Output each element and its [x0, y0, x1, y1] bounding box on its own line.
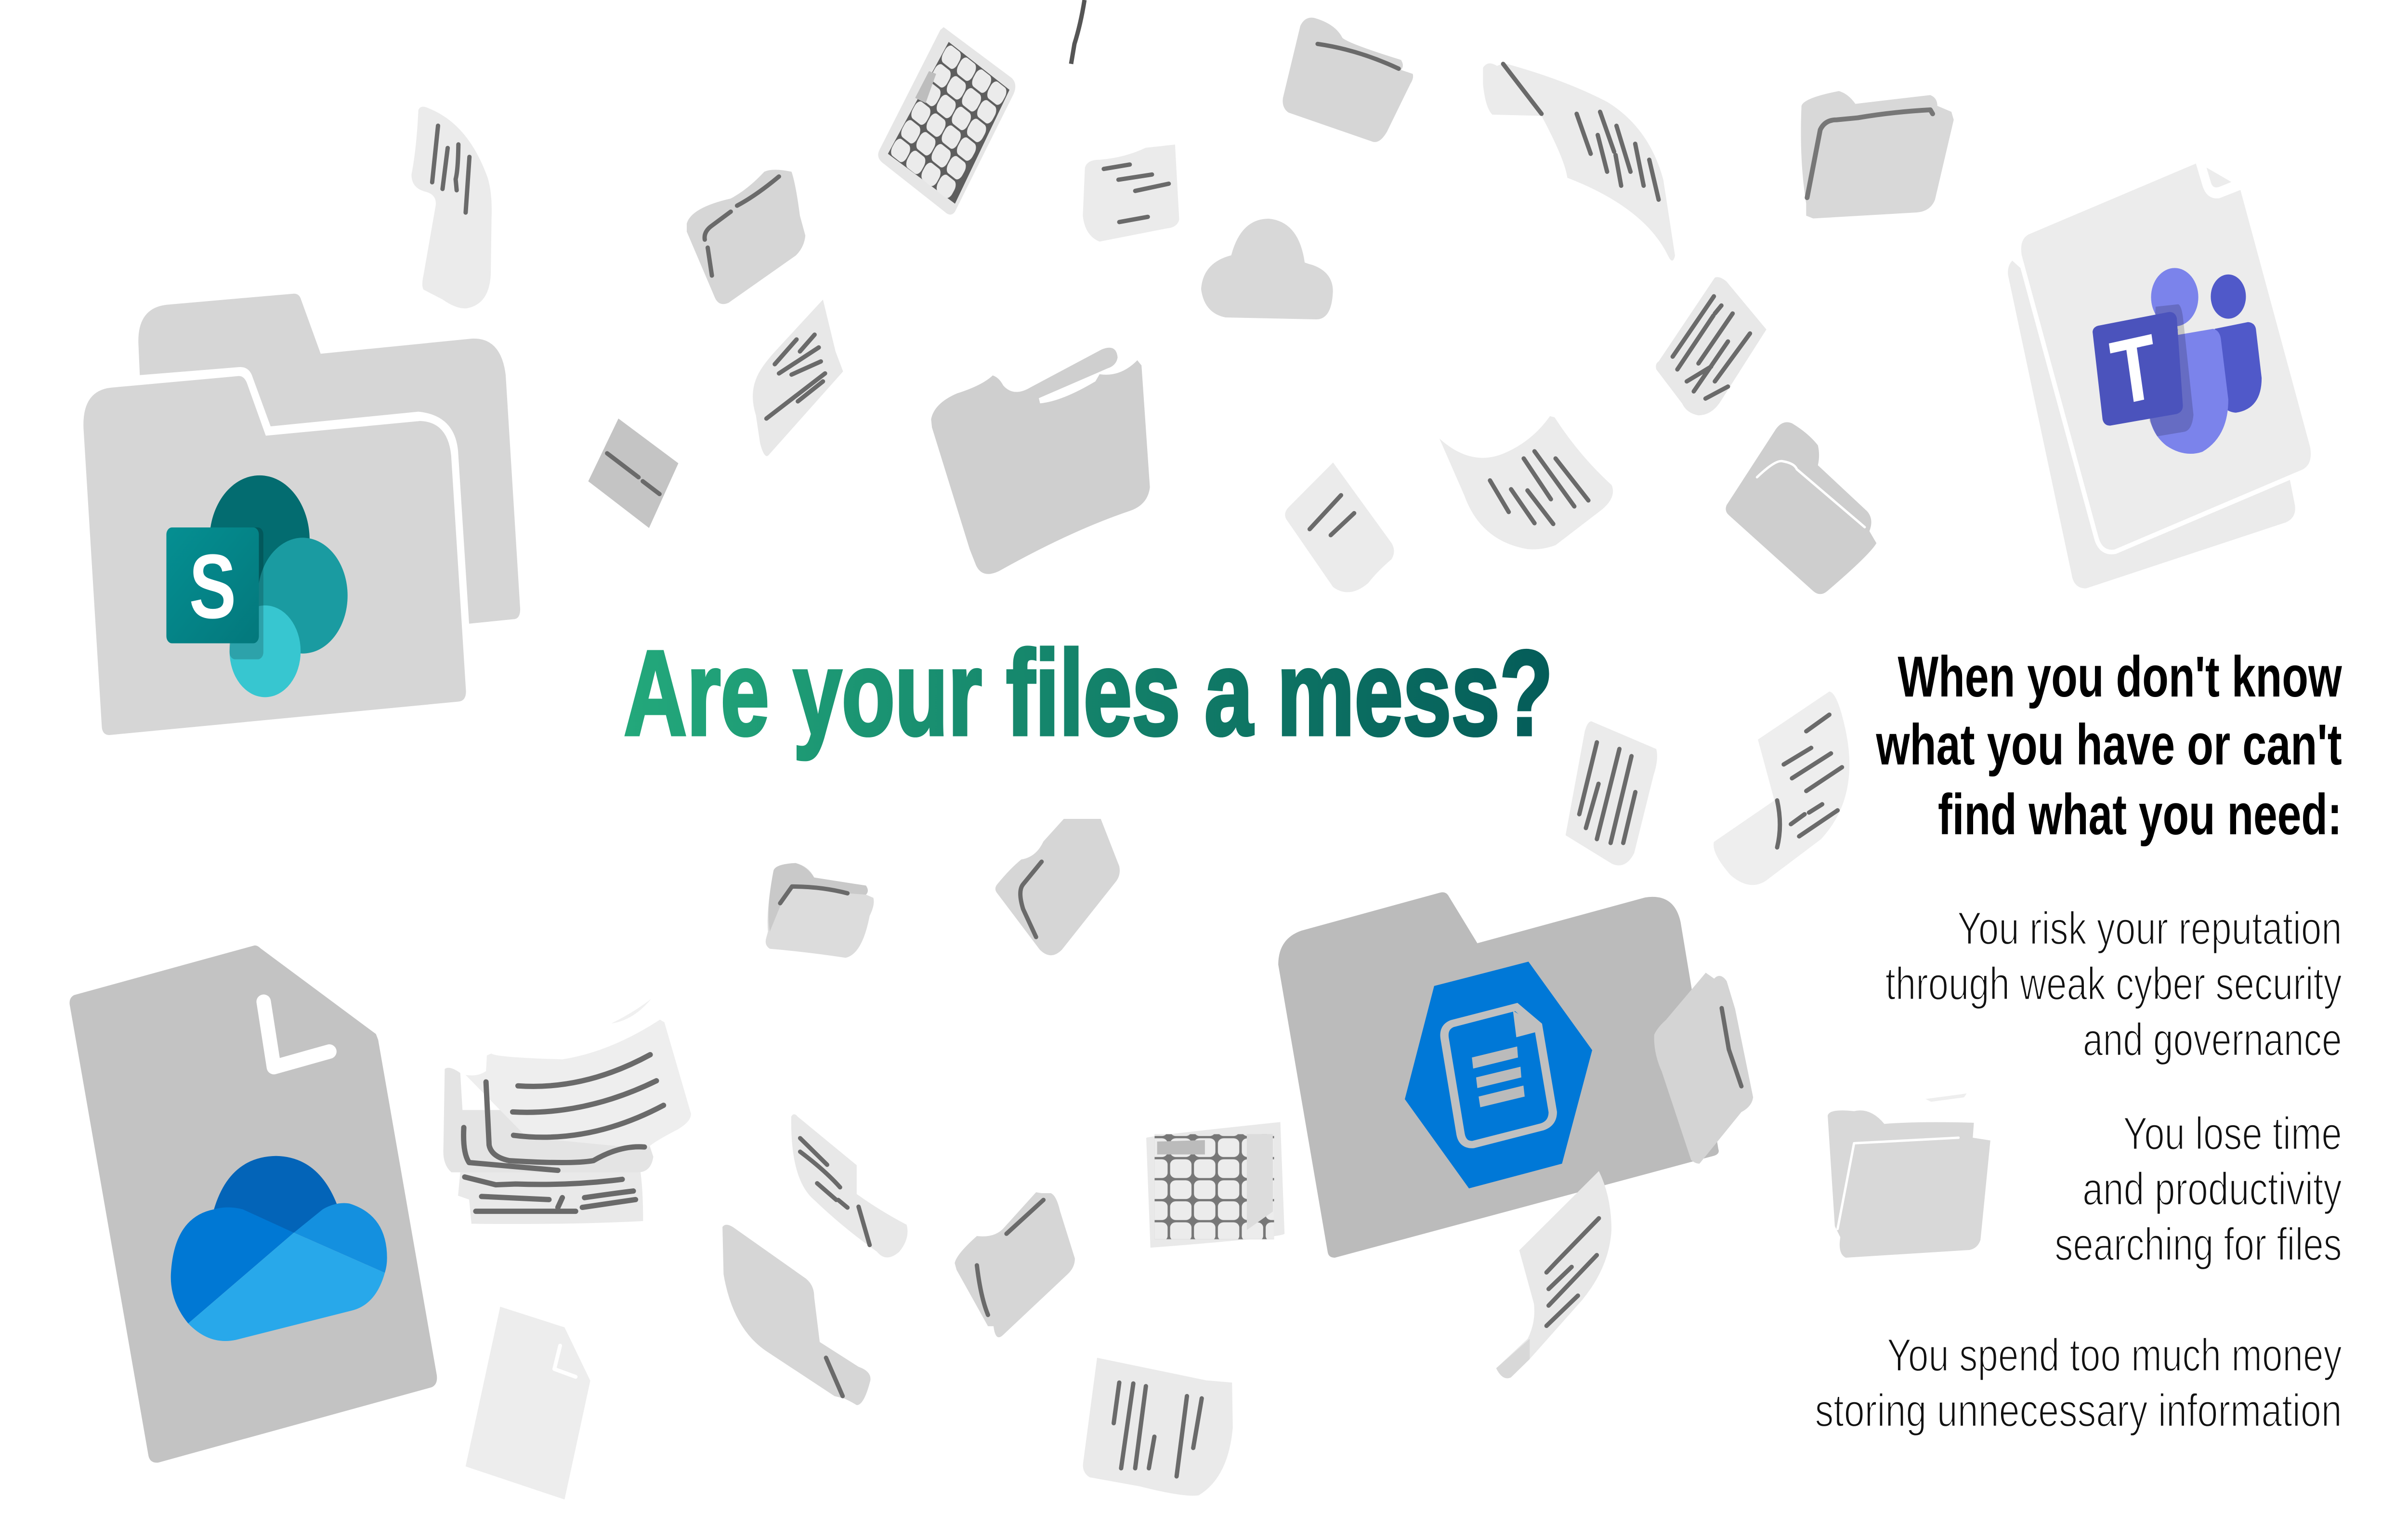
text block: time: You lose time: [2123, 1108, 2342, 1159]
teams back page: [2008, 261, 2295, 589]
heading: right column: find what you need:: [1938, 783, 2342, 847]
text block: reputation: [1885, 903, 2342, 1066]
icon: document in hexagon: [1444, 1007, 1553, 1144]
folder lower centre: [955, 1192, 1075, 1337]
central folder: [1278, 892, 1719, 1258]
document with lines: [1656, 277, 1767, 415]
large open folder: [931, 348, 1150, 574]
folder top right: [1801, 91, 1954, 219]
icon: blue hexagon: [1405, 961, 1592, 1188]
paper top centre: [1083, 145, 1179, 242]
heading: right column: [1876, 645, 2342, 847]
title: Are your files a mess?: [624, 626, 1553, 761]
icon: OneDrive cloud: [171, 1156, 387, 1341]
icon: SharePoint logo: [166, 475, 348, 697]
heading: right column: what you have or can't: [1876, 713, 2342, 777]
teams front page: [2021, 164, 2311, 550]
text block: time: [2055, 1108, 2342, 1270]
sharepoint back folder: [138, 294, 520, 624]
text block: time: searching for files: [2055, 1219, 2342, 1270]
grid document lower: [1146, 1122, 1284, 1248]
paper: top left: [411, 106, 492, 308]
text block: reputation: You risk your reputation: [1957, 903, 2342, 954]
text block: reputation: and governance: [2083, 1014, 2342, 1066]
stray line at top: [1071, 0, 1085, 64]
heading: right column: When you don't know: [1898, 645, 2342, 709]
document right: [1566, 721, 1657, 866]
text block: money: You spend too much money: [1887, 1329, 2342, 1381]
paper stack: [444, 999, 691, 1224]
text block: reputation: through weak cyber security: [1885, 958, 2342, 1010]
small folder: [687, 170, 805, 304]
folder top: [1283, 18, 1413, 142]
OneDrive file tile: [70, 946, 437, 1463]
folder centre: [995, 819, 1120, 955]
paper overlapping folder: [1496, 1171, 1611, 1378]
sharepoint front folder: [83, 376, 466, 735]
small paper: [1285, 462, 1394, 592]
curved paper: [1440, 416, 1613, 549]
text block: time: and productivity: [2082, 1163, 2342, 1215]
icon: Teams T: T: [2105, 314, 2164, 425]
long folder: [722, 1225, 870, 1405]
small file: [466, 1307, 590, 1500]
folder overlapping right: [1654, 973, 1753, 1164]
pale folder: [1828, 1093, 1990, 1258]
grey card: [588, 419, 679, 528]
folder lower left: [766, 863, 874, 958]
text block: money: [1815, 1329, 2342, 1436]
paper right: [1714, 691, 1849, 885]
icon: SharePoint logo: S: [189, 535, 236, 637]
dark folder: [1726, 422, 1876, 594]
icon: Teams logo shapes: [2093, 268, 2262, 454]
curled paper lower: [791, 1114, 907, 1257]
paper bottom: [1083, 1358, 1233, 1496]
text block: money: storing unnecessary information: [1815, 1385, 2342, 1436]
paper with text lines: [753, 300, 843, 456]
curled paper: [1483, 63, 1675, 261]
icon: cloud: [1201, 219, 1333, 319]
grid document: [878, 27, 1015, 215]
file corner mark: [263, 1002, 329, 1067]
